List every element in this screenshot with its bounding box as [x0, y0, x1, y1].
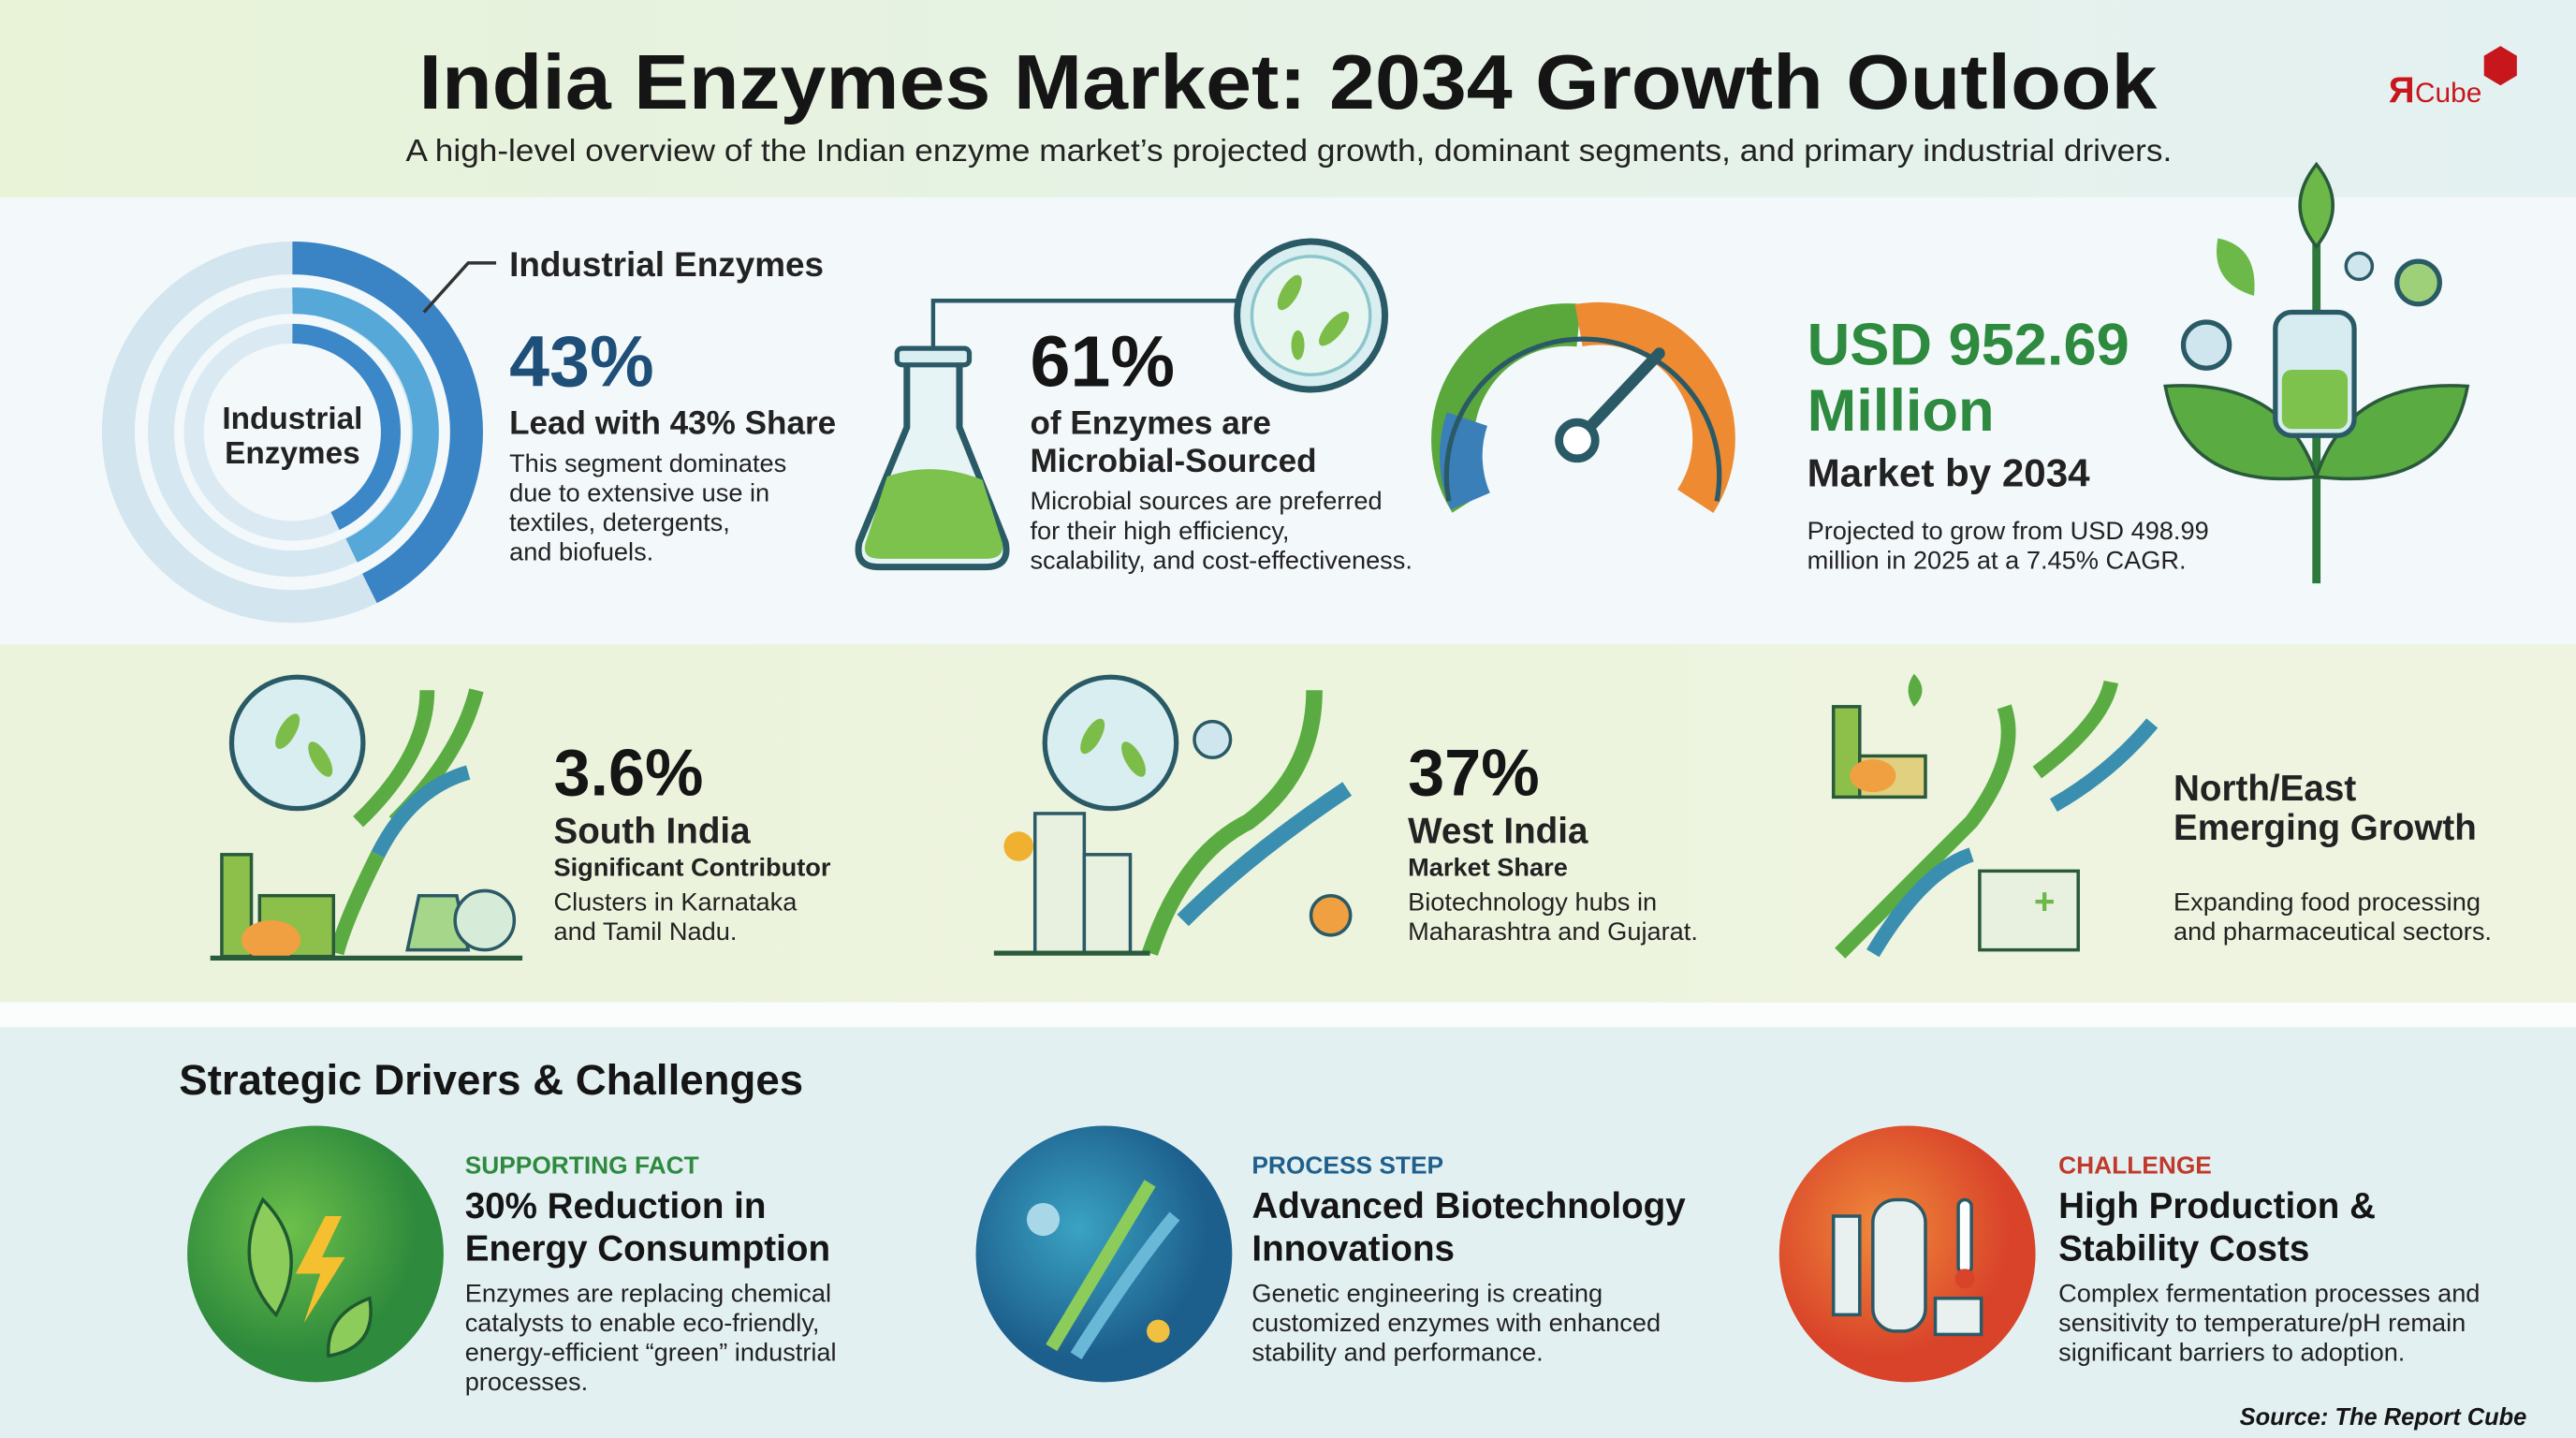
text: north/east: Expanding food processing [2174, 888, 2481, 917]
text: process step [1251, 1151, 1686, 1366]
text: supporting fact [465, 1151, 837, 1396]
text: 61% microbial: for their high efficiency, [1030, 516, 1289, 545]
text: north/east: and pharmaceutical sectors. [2174, 917, 2492, 946]
text: process step: customized enzymes with enhanced [1251, 1308, 1661, 1337]
heading: Strategic Drivers & Challenges [179, 1056, 803, 1104]
icon: energy [187, 1125, 444, 1382]
text: south india: and Tamil Nadu. [553, 917, 737, 946]
text: challenge: Stability Costs [2058, 1228, 2309, 1269]
text: industrial enzymes 43%: This segment dominates [509, 448, 786, 477]
panel: strategic drivers [0, 1003, 2576, 1438]
icon: plant with bioreactor [2165, 165, 2467, 583]
text: supporting fact: catalysts to enable eco-friendly, [465, 1308, 819, 1337]
text: process step: stability and performance. [1251, 1337, 1544, 1366]
text: supporting fact: Energy Consumption [465, 1228, 830, 1269]
text: industrial enzymes 43%: due to extensive use in [509, 477, 769, 506]
text: industrial enzymes 43%: textiles, detergents, [509, 507, 730, 536]
icon: south india [211, 677, 522, 960]
text: south india: South India [553, 812, 751, 852]
text: market size: Million [1808, 378, 1995, 444]
text: south india [553, 736, 831, 946]
panel: industrial enzymes donut [118, 258, 496, 607]
logo: Я [2389, 70, 2415, 110]
text: industrial enzymes 43%: 43% [509, 322, 654, 403]
logo [2389, 46, 2517, 110]
text: industrial enzymes 43% [509, 245, 836, 566]
icon: flask with petri dish [858, 242, 1385, 567]
text: market size: Market by 2034 [1808, 451, 2090, 495]
icon: west india [994, 677, 1351, 953]
text: challenge: sensitivity to temperature/pH remain [2058, 1308, 2466, 1337]
panel: regional band [0, 644, 2576, 1003]
text: process step: Innovations [1251, 1228, 1455, 1269]
text: process step: PROCESS STEP [1251, 1151, 1443, 1179]
subtitle: A high-level overview of the Indian enzyme market’s projected growth, dominant segments, and primary industrial drivers. [406, 134, 2172, 169]
text: supporting fact: energy-efficient “green” industrial [465, 1337, 837, 1366]
icon: north/east [1834, 674, 2152, 953]
text: challenge [2058, 1151, 2480, 1366]
text: industrial enzymes 43%: and biofuels. [509, 537, 653, 566]
text: 61% microbial: scalability, and cost-effectiveness. [1030, 545, 1412, 574]
icon: production [1779, 1125, 2036, 1382]
text: market size: million in 2025 at a 7.45% CAGR. [1808, 545, 2187, 574]
text: process step: Advanced Biotechnology [1251, 1186, 1686, 1226]
text: industrial enzymes 43%: Industrial Enzymes [509, 245, 824, 284]
text: supporting fact: SUPPORTING FACT [465, 1151, 699, 1179]
text: process step: Genetic engineering is creating [1251, 1278, 1603, 1307]
text: 61% microbial: Microbial sources are preferred [1030, 486, 1383, 515]
text: 61% microbial: Microbial-Sourced [1030, 443, 1317, 479]
text: south india: 3.6% [553, 736, 703, 810]
text: supporting fact: Enzymes are replacing chemical [465, 1278, 831, 1307]
header band [0, 0, 2576, 198]
text: 61% microbial: 61% [1030, 322, 1175, 403]
panel: industrial enzymes donut: Industrial [222, 402, 362, 436]
text: south india: Significant Contributor [553, 853, 831, 882]
text: challenge: significant barriers to adoption. [2058, 1337, 2405, 1366]
text: challenge: High Production & [2058, 1186, 2376, 1226]
panel: industrial enzymes donut: Enzymes [225, 436, 360, 471]
icon: north/east: + [2034, 882, 2055, 922]
text: west india: Biotechnology hubs in [1408, 888, 1657, 917]
text: west india: Market Share [1408, 853, 1568, 882]
text: market size: Projected to grow from USD 498.99 [1808, 516, 2209, 545]
icon: gauge [1446, 324, 1720, 501]
text: 61% microbial [1030, 322, 1412, 574]
text: supporting fact: 30% Reduction in [465, 1186, 766, 1226]
text: north/east: Emerging Growth [2174, 808, 2477, 848]
text: industrial enzymes 43%: Lead with 43% Share [509, 404, 836, 441]
title: India Enzymes Market: 2034 Growth Outlook [419, 39, 2158, 125]
logo: Cube [2415, 78, 2481, 109]
text: north/east [2174, 769, 2492, 946]
text: supporting fact: processes. [465, 1367, 588, 1396]
text: west india: Maharashtra and Gujarat. [1408, 917, 1698, 946]
text: south india: Clusters in Karnataka [553, 888, 798, 917]
text: market size [1808, 313, 2209, 574]
text: challenge: CHALLENGE [2058, 1151, 2212, 1179]
text: 61% microbial: of Enzymes are [1030, 404, 1271, 441]
text: market size: USD 952.69 [1808, 313, 2130, 378]
icon: biotech [976, 1125, 1232, 1382]
source: Source: The Report Cube [2240, 1404, 2526, 1431]
text: challenge: Complex fermentation processes and [2058, 1278, 2480, 1307]
text: north/east: North/East [2174, 769, 2356, 809]
text: west india [1408, 736, 1698, 946]
text: west india: 37% [1408, 736, 1540, 810]
text: west india: West India [1408, 812, 1588, 852]
